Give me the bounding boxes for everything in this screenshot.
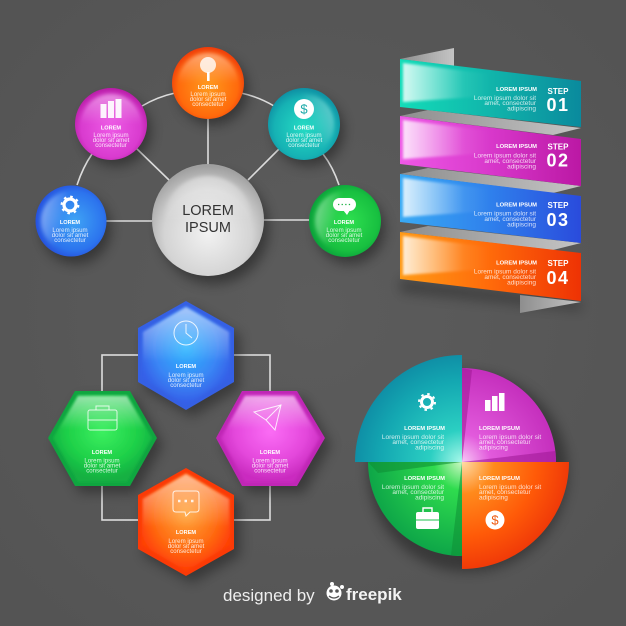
hexagon: orange speech bubble	[138, 468, 234, 576]
icon: freepik mascot	[326, 582, 344, 600]
ribbon: step 02: 02	[546, 150, 570, 170]
freepik credit: designed by	[223, 586, 315, 605]
sphere: blue gear: LOREM	[60, 220, 80, 226]
sphere: orange magnifier	[172, 47, 244, 119]
segmented pie chart	[355, 355, 569, 572]
sphere: green chat: Lorem ipsum	[326, 227, 362, 234]
hexagon: magenta paper plane: dolor sit amet	[252, 462, 289, 470]
icon: gear	[62, 197, 78, 213]
ribbon: step 03: 03	[546, 210, 570, 230]
hexagon: green briefcase	[48, 391, 157, 486]
hexagon: orange speech bubble: consectetur	[170, 548, 202, 555]
sphere network diagram	[36, 47, 385, 284]
segment: magenta: adipiscing	[479, 444, 508, 452]
sphere: centre	[152, 164, 264, 276]
sphere: teal dollar: consectetur	[288, 142, 320, 149]
icon: paper plane	[254, 405, 281, 430]
ribbon: step 02: adipiscing	[507, 164, 536, 170]
sphere: magenta chart: LOREM	[101, 126, 121, 132]
hexagon: orange speech bubble: dolor sit amet	[168, 543, 205, 550]
sphere: blue gear: Lorem ipsum	[52, 227, 88, 234]
icon: briefcase	[416, 508, 439, 529]
ribbon shadow	[400, 279, 581, 310]
hexagon: magenta paper plane	[216, 391, 325, 486]
hexagon: green briefcase: Lorem ipsum	[84, 458, 120, 464]
segment: teal	[355, 355, 462, 462]
segment: green: amet, consectetur	[392, 489, 445, 496]
sphere: teal dollar	[268, 88, 340, 160]
segment: green	[368, 462, 462, 556]
ribbon: step 01	[400, 59, 581, 127]
segment: teal: amet, consectetur	[392, 439, 445, 446]
segment: orange: Lorem ipsum dolor sit	[479, 484, 541, 491]
step ribbons	[400, 48, 581, 313]
ribbon: step 01: 01	[546, 95, 570, 115]
ribbon: step 02: STEP	[548, 142, 569, 152]
sphere: magenta chart	[75, 88, 147, 160]
hexagon: blue clock: Lorem ipsum	[168, 372, 204, 379]
hexagon: blue clock: LOREM	[176, 364, 196, 370]
sphere: green chat: dolor sit amet	[326, 232, 363, 239]
connector lines	[77, 93, 339, 221]
sphere: centre: IPSUM	[185, 220, 231, 236]
sphere: orange magnifier: LOREM	[198, 85, 218, 91]
connector rectangle	[102, 355, 270, 520]
segment: magenta	[462, 368, 556, 462]
hexagon: blue clock: consectetur	[170, 382, 202, 389]
ribbon: step 03: adipiscing	[507, 222, 536, 228]
segment: green: adipiscing	[415, 494, 444, 502]
hexagon: magenta paper plane: consectetur	[254, 468, 286, 474]
ribbon: step 03: Lorem ipsum dolor sit	[474, 210, 536, 218]
hexagon: orange speech bubble: Lorem ipsum	[168, 538, 204, 545]
segment: orange: LOREM IPSUM	[479, 476, 520, 482]
sphere: centre: LOREM	[182, 203, 234, 219]
icon: bars	[100, 99, 122, 118]
icon: magnifier	[200, 57, 216, 81]
sphere: orange magnifier: dolor sit amet	[190, 96, 227, 103]
ribbon: step 04: adipiscing	[507, 280, 536, 286]
ribbon: step 01: amet, consectetur	[484, 100, 537, 107]
segment: magenta: amet, consectetur	[479, 439, 531, 446]
ribbon: step 01: adipiscing	[507, 106, 536, 112]
sphere: teal dollar: dolor sit amet	[286, 137, 323, 144]
hexagon: orange speech bubble: LOREM	[176, 530, 196, 536]
icon: speech bubble	[173, 491, 199, 516]
ribbon: step 02: Lorem ipsum dolor sit	[474, 152, 536, 160]
ribbon: step 04	[400, 232, 581, 301]
ribbon: step 01: LOREM IPSUM	[496, 87, 537, 93]
hexagon shadows	[54, 308, 331, 583]
sphere: orange magnifier: Lorem ipsum	[190, 91, 226, 98]
ribbon: step 01: STEP	[548, 87, 569, 96]
sphere: teal dollar: Lorem ipsum	[286, 132, 322, 139]
hexagon: blue clock: dolor sit amet	[168, 377, 205, 384]
icon: clock	[174, 321, 198, 345]
segment: magenta: Lorem ipsum dolor sit	[479, 434, 541, 441]
ribbon: step 04: LOREM IPSUM	[496, 260, 537, 266]
sphere: magenta chart: dolor sit amet	[93, 137, 130, 144]
segment: orange: adipiscing	[479, 494, 508, 502]
icon: bars	[485, 393, 504, 411]
sphere: orange magnifier: consectetur	[192, 101, 224, 108]
segment: orange: amet, consectetur	[479, 489, 531, 496]
sphere: green chat	[309, 185, 381, 257]
icon: gear	[419, 394, 435, 410]
ribbon: step 03: STEP	[548, 201, 569, 210]
hexagon: magenta paper plane: LOREM	[260, 450, 280, 456]
hexagon cycle diagram	[48, 301, 331, 583]
icon: briefcase	[88, 406, 117, 430]
segment: teal: LOREM IPSUM	[404, 426, 445, 432]
hexagon: magenta paper plane: Lorem ipsum	[252, 458, 288, 464]
sphere: blue gear	[36, 186, 106, 256]
sphere: green chat: consectetur	[328, 237, 360, 244]
hexagon: green briefcase: LOREM	[92, 450, 112, 456]
hexagon: green briefcase: consectetur	[86, 468, 118, 474]
freepik credit: freepik	[346, 585, 402, 604]
ribbon: step 04: Lorem ipsum dolor sit	[474, 268, 536, 276]
segment: magenta: LOREM IPSUM	[479, 426, 520, 432]
icon: dollar coin: $	[491, 512, 499, 528]
ribbon: step 03: LOREM IPSUM	[496, 202, 537, 208]
segment: green: Lorem ipsum dolor sit	[382, 484, 444, 491]
sphere: magenta chart: Lorem ipsum	[93, 132, 129, 139]
segment: teal: adipiscing	[415, 444, 444, 452]
ribbon: step 04: 04	[546, 268, 570, 288]
ribbon: step 03: amet, consectetur	[484, 216, 537, 223]
segment: green: LOREM IPSUM	[404, 476, 445, 482]
sphere: blue gear: dolor sit amet	[52, 232, 89, 239]
hexagon: green briefcase: dolor sit amet	[84, 462, 121, 470]
ribbon: step 02	[400, 116, 581, 186]
freepik credit	[223, 582, 402, 605]
ribbon: step 03	[400, 174, 581, 243]
sphere: magenta chart: consectetur	[95, 142, 127, 149]
sphere: green chat: LOREM	[334, 220, 354, 226]
ribbon: step 04: amet, consectetur	[484, 274, 537, 281]
ribbon: step 02: LOREM IPSUM	[496, 144, 537, 150]
pie shadow	[368, 372, 568, 572]
segment: orange	[462, 462, 569, 569]
sphere: teal dollar: LOREM	[294, 126, 314, 132]
icon: chat bubble	[333, 198, 356, 215]
hexagon: blue clock	[138, 301, 234, 410]
icon: dollar coin: $	[300, 102, 308, 116]
sphere: blue gear: consectetur	[54, 237, 86, 244]
ribbon: step 02: amet, consectetur	[484, 158, 537, 165]
ribbon: step 01: Lorem ipsum dolor sit	[474, 95, 536, 102]
ribbon: step 04: STEP	[548, 259, 569, 268]
sphere shadows	[41, 55, 385, 284]
segment: teal: Lorem ipsum dolor sit	[382, 434, 444, 441]
grey folds	[400, 48, 581, 313]
